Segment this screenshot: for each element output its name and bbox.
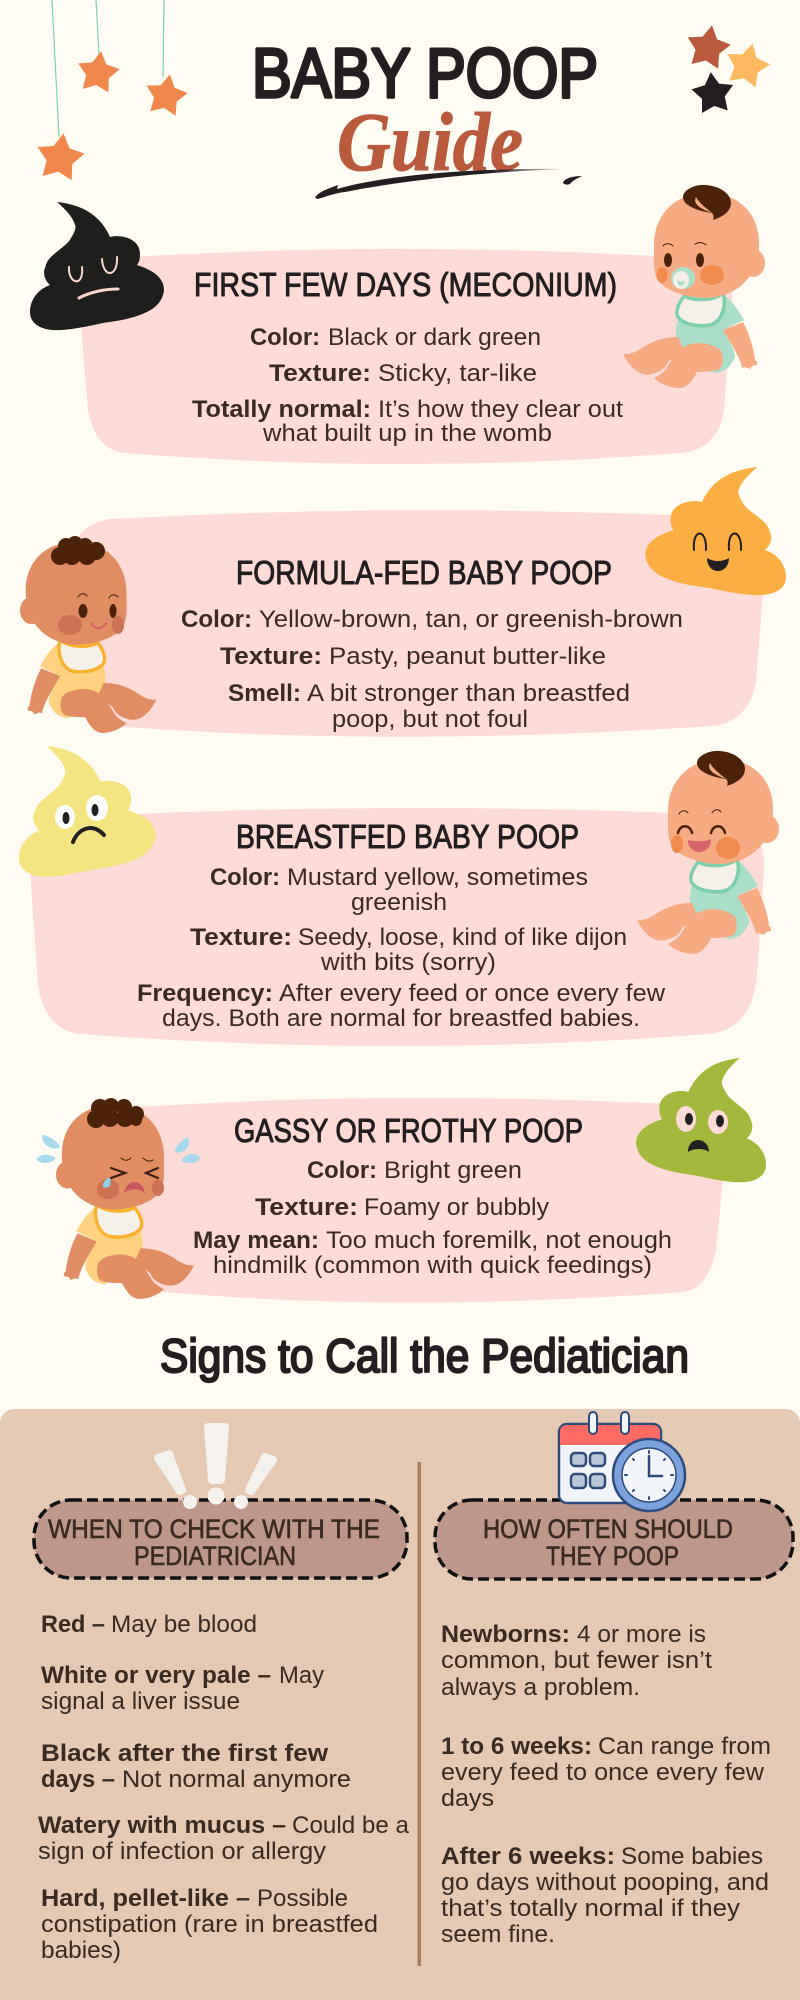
text: when to check list: Not normal anymore bbox=[122, 1766, 351, 1793]
text: when to check list: White or very pale – bbox=[41, 1662, 271, 1689]
text: breastfed details: greenish bbox=[351, 889, 447, 916]
text: how often list: 4 or more is bbox=[577, 1621, 706, 1648]
text: how often list: seem fine. bbox=[441, 1921, 555, 1948]
icon: exclamation marks bbox=[158, 1427, 273, 1506]
text: meconium details: Black or dark green bbox=[328, 324, 541, 351]
pill: how often bbox=[435, 1500, 793, 1579]
panel: first few days bbox=[79, 249, 732, 464]
text: gassy details: Texture: bbox=[255, 1194, 358, 1221]
text: breastfed details: Color: bbox=[210, 864, 280, 891]
heading: meconium: FIRST FEW DAYS (MECONIUM) bbox=[194, 266, 617, 303]
icon: tear drops bbox=[36, 1135, 200, 1163]
text: breastfed details: After every feed or once every few bbox=[279, 980, 665, 1007]
text: how often list bbox=[441, 1621, 771, 1948]
text: when to check list: Possible bbox=[257, 1885, 348, 1912]
text: how often list: go days without pooping, and bbox=[441, 1869, 769, 1896]
title bbox=[252, 34, 598, 199]
text: how often list: always a problem. bbox=[441, 1674, 640, 1701]
text: when to check list: Red – bbox=[41, 1611, 105, 1638]
text: gassy details: Color: bbox=[307, 1157, 377, 1184]
text: how often list: 1 to 6 weeks: bbox=[441, 1733, 592, 1760]
text: when to check list: babies) bbox=[41, 1937, 121, 1964]
text: when to check list: sign of infection or allergy bbox=[38, 1838, 327, 1865]
illustration: laughing baby bbox=[637, 751, 779, 954]
text: breastfed details: with bits (sorry) bbox=[320, 949, 496, 976]
corner stars bbox=[683, 22, 774, 114]
heading: breastfed: BREASTFED BABY POOP bbox=[236, 818, 579, 855]
pill: how often: HOW OFTEN SHOULD bbox=[483, 1514, 733, 1544]
text: meconium details: Sticky, tar-like bbox=[378, 360, 537, 387]
text: formula-fed details: Texture: bbox=[220, 643, 322, 670]
text: when to check list: Watery with mucus – bbox=[38, 1812, 286, 1839]
heading: signs to call: Signs to Call the Pediatician bbox=[160, 1329, 689, 1382]
text: when to check list: May be blood bbox=[111, 1611, 257, 1638]
heading: gassy: GASSY OR FROTHY POOP bbox=[234, 1112, 583, 1149]
illustration: crying baby bbox=[36, 1098, 200, 1299]
illustration: smiling baby bbox=[20, 536, 156, 733]
text: formula-fed details: A bit stronger than breastfed bbox=[307, 680, 630, 707]
panel: breastfed bbox=[30, 808, 764, 1046]
text: breastfed details: Seedy, loose, kind of like dijon bbox=[298, 924, 627, 951]
pill: when to check: PEDIATRICIAN bbox=[134, 1541, 296, 1571]
text: formula-fed details bbox=[181, 606, 683, 733]
text: when to check list: signal a liver issue bbox=[41, 1688, 240, 1715]
text: meconium details: It’s how they clear out bbox=[378, 396, 623, 423]
illustration: baby with pacifier bbox=[623, 185, 765, 388]
text: gassy details: Bright green bbox=[384, 1157, 522, 1184]
panel: gassy or frothy bbox=[110, 1098, 727, 1302]
panel: tan footer bbox=[0, 1409, 800, 2000]
text: formula-fed details: Smell: bbox=[228, 680, 301, 707]
heading: formula-fed: FORMULA-FED BABY POOP bbox=[236, 554, 612, 591]
text: gassy details: May mean: bbox=[193, 1227, 319, 1254]
text: when to check list: Hard, pellet-like – bbox=[41, 1885, 250, 1912]
text: formula-fed details: Color: bbox=[181, 606, 252, 633]
pill: when to check: WHEN TO CHECK WITH THE bbox=[48, 1514, 380, 1544]
text: meconium details: Totally normal: bbox=[192, 396, 371, 423]
text: meconium details: Color: bbox=[250, 324, 320, 351]
text: when to check list bbox=[38, 1611, 409, 1964]
text: breastfed details: Texture: bbox=[190, 924, 292, 951]
icon: calendar and clock bbox=[559, 1412, 685, 1511]
text: how often list: that’s totally normal if they bbox=[441, 1895, 741, 1922]
text: formula-fed details: poop, but not foul bbox=[332, 706, 528, 733]
pill: how often: THEY POOP bbox=[546, 1541, 679, 1571]
text: how often list: After 6 weeks: bbox=[441, 1843, 615, 1870]
title: BABY POOP bbox=[252, 34, 598, 112]
icon: black poop bbox=[30, 202, 164, 330]
text: gassy details bbox=[193, 1157, 672, 1279]
text: breastfed details: Frequency: bbox=[137, 980, 273, 1007]
divider bbox=[418, 1462, 421, 1966]
text: how often list: Newborns: bbox=[441, 1621, 570, 1648]
text: breastfed details: Mustard yellow, sometimes bbox=[287, 864, 588, 891]
text: when to check list: days – bbox=[41, 1766, 115, 1793]
hanging stars bbox=[34, 0, 190, 181]
text: how often list: Some babies bbox=[621, 1843, 763, 1870]
text: when to check list: Could be a bbox=[292, 1812, 409, 1839]
text: gassy details: hindmilk (common with quick feedings) bbox=[213, 1252, 652, 1279]
text: breastfed details: days. Both are normal for breastfed babies. bbox=[162, 1005, 640, 1032]
text: meconium details bbox=[192, 324, 623, 447]
text: meconium details: what built up in the womb bbox=[262, 420, 552, 447]
text: when to check list: May bbox=[279, 1662, 325, 1689]
text: how often list: days bbox=[441, 1785, 494, 1812]
text: how often list: Can range from bbox=[598, 1733, 771, 1760]
text: formula-fed details: Yellow-brown, tan, or greenish-brown bbox=[259, 606, 683, 633]
text: when to check list: constipation (rare in breastfed bbox=[41, 1911, 378, 1938]
text: formula-fed details: Pasty, peanut butter-like bbox=[329, 643, 606, 670]
text: when to check list: Black after the first few bbox=[41, 1740, 329, 1767]
text: gassy details: Foamy or bubbly bbox=[364, 1194, 550, 1221]
icon: yellow poop bbox=[19, 746, 156, 877]
text: gassy details: Too much foremilk, not enough bbox=[326, 1227, 672, 1254]
panel: formula-fed bbox=[70, 510, 764, 737]
title: Guide bbox=[337, 96, 523, 189]
pill: when to check bbox=[34, 1500, 407, 1578]
text: how often list: every feed to once every few bbox=[441, 1759, 764, 1786]
text: meconium details: Texture: bbox=[269, 360, 371, 387]
icon: orange poop bbox=[645, 467, 786, 595]
text: how often list: common, but fewer isn’t bbox=[441, 1647, 712, 1674]
text: breastfed details bbox=[137, 864, 665, 1032]
icon: green poop bbox=[636, 1058, 766, 1182]
